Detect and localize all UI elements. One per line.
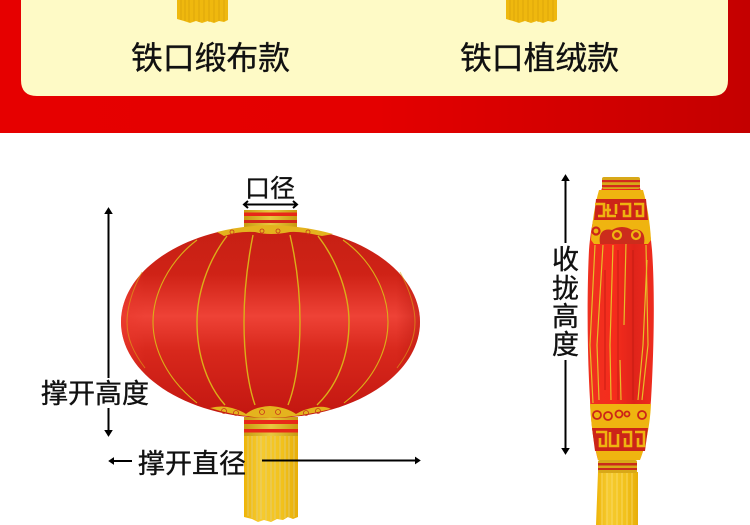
top cloud trim bbox=[217, 225, 333, 236]
label: 收拢高度: 高 bbox=[552, 302, 579, 332]
arrow: open diameter right bbox=[262, 458, 419, 462]
label: 收拢高度: 拢 bbox=[552, 274, 579, 304]
arrow: collapsed height up bbox=[563, 176, 568, 243]
label: 口径: 口径 bbox=[245, 175, 295, 203]
arrow: open height down bbox=[106, 408, 111, 435]
label: 铁口植绒款: 铁口植绒款 bbox=[460, 40, 619, 76]
label: 铁口缎布款: 铁口缎布款 bbox=[131, 40, 290, 76]
open lantern bbox=[121, 210, 420, 522]
label: 收拢高度: 度 bbox=[552, 330, 579, 360]
lantern tassel bbox=[244, 433, 298, 522]
red header band bbox=[0, 0, 750, 133]
bottom cloud trim bbox=[210, 406, 331, 418]
collapsed tassel bbox=[596, 472, 638, 525]
collapsed body bbox=[588, 188, 654, 460]
cream panel bbox=[21, 0, 728, 96]
icon: tassel right bbox=[506, 0, 557, 23]
lantern body bbox=[121, 226, 420, 418]
arrow: open diameter left bbox=[110, 459, 132, 463]
lantern upper collar bbox=[244, 210, 297, 228]
icon: tassel left bbox=[177, 0, 228, 23]
collapsed lantern bbox=[588, 177, 654, 525]
top key pattern bbox=[591, 190, 651, 244]
collapsed top collar bbox=[602, 177, 640, 189]
collapsed bottom collar bbox=[598, 460, 637, 473]
label: 撑开直径: 撑开直径 bbox=[138, 449, 246, 479]
lantern side shading bbox=[121, 226, 420, 418]
label: 收拢高度: 收 bbox=[552, 245, 579, 275]
lantern lower collar bbox=[244, 417, 298, 436]
bottom key pattern bbox=[590, 404, 651, 460]
gold ribs bbox=[127, 235, 415, 405]
arrow: mouth diameter bbox=[244, 201, 297, 208]
arrow: collapsed height down bbox=[563, 360, 568, 453]
label: 撑开高度: 撑开高度 bbox=[41, 379, 149, 409]
collapsed gold ribs bbox=[590, 243, 648, 403]
arrow: open height up bbox=[106, 209, 111, 378]
label: 收拢高度 bbox=[552, 245, 579, 360]
collapsed dark folds bbox=[605, 250, 633, 400]
